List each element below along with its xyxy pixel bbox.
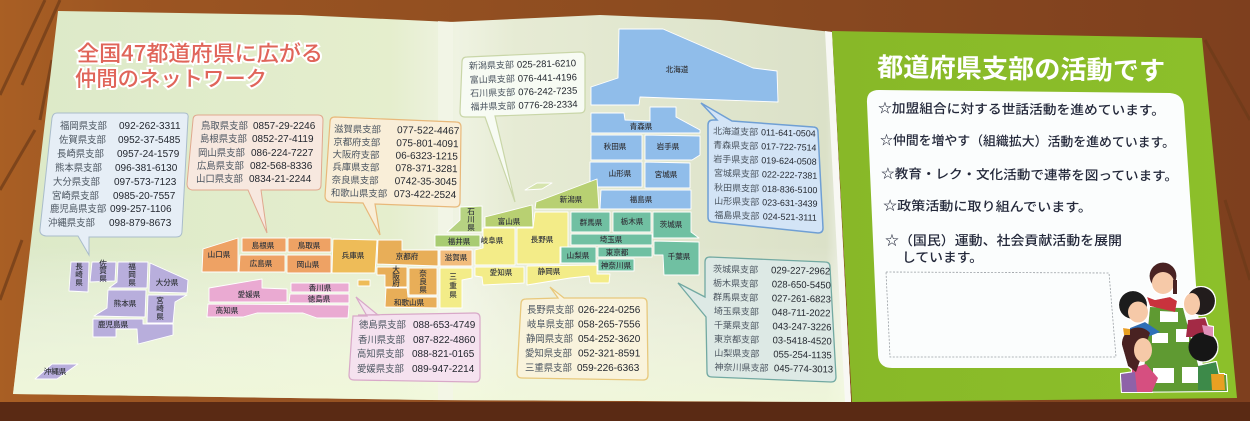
callout bubble — [349, 297, 480, 382]
phone list: 058-265-7556 — [578, 320, 641, 330]
callout bubble — [40, 113, 188, 255]
Fukuoka: 福 — [128, 261, 136, 272]
callout: Chugoku branches — [187, 115, 323, 233]
phone list: 052-321-8591 — [578, 348, 641, 360]
phone list: 広島県支部 — [197, 158, 244, 172]
phone list: 岡山県支部 — [198, 145, 245, 159]
phone list: 018-836-5100 — [762, 184, 818, 195]
Nara: 奈 — [419, 268, 427, 279]
phone list — [357, 317, 476, 375]
phone list: 新潟県支部 — [469, 58, 514, 72]
dashed blank box — [886, 272, 1116, 357]
Hyogo: 兵庫県 — [342, 250, 365, 261]
bottom sticker base — [1121, 375, 1227, 392]
phone list: 075-801-4091 — [396, 138, 459, 150]
phone list: 鹿児島県支部 — [50, 201, 106, 215]
phone list: 011-641-0504 — [761, 127, 816, 139]
Saga: 賀 — [99, 265, 107, 276]
Fukui — [435, 235, 480, 247]
phone list: 076-242-7235 — [518, 86, 577, 98]
map: Kinki — [332, 239, 472, 308]
map: Chubu and Mie — [440, 212, 610, 308]
Saga: 佐 — [99, 258, 107, 269]
girl at top — [1147, 262, 1177, 312]
Miyagi: 宮城県 — [655, 169, 678, 180]
heading: 都道府県支部の活動です — [877, 47, 1165, 88]
phone list: 沖縄県支部 — [48, 215, 95, 229]
Nagano — [517, 212, 568, 264]
phone list: 055-254-1135 — [773, 349, 832, 362]
Tokushima: 徳島県 — [308, 294, 331, 304]
map: Chugoku — [202, 238, 331, 273]
Nagasaki: 県 — [75, 277, 83, 288]
Osaka: 大 — [392, 264, 400, 275]
phone list: 三重県支部 — [525, 360, 572, 374]
activity list: しています。 — [902, 247, 983, 266]
phone list — [48, 118, 181, 229]
Okinawa: 沖縄県 — [44, 366, 67, 377]
phone list: 宮崎県支部 — [52, 188, 99, 202]
phone list: 静岡県支部 — [526, 331, 573, 345]
phone list: 熊本県支部 — [55, 160, 102, 174]
Kochi: 高知県 — [216, 305, 239, 316]
callout: Hokkaido and Tohoku branches — [701, 103, 823, 233]
activity list: ☆教育・レク・文化活動で連帯を図っています。 — [881, 163, 1178, 185]
Ishikawa: 石 — [467, 206, 475, 217]
phone list: 082-568-8336 — [250, 161, 313, 172]
Shizuoka: 静岡県 — [538, 266, 561, 277]
phone list: 06-6323-1215 — [395, 151, 458, 163]
Chiba: 千葉県 — [668, 251, 691, 262]
phone list — [331, 121, 460, 201]
phone list: 北海道支部 — [713, 124, 758, 138]
map: Kanto — [561, 212, 699, 275]
phone list: 03-5418-4520 — [772, 335, 832, 348]
Niigata: 新潟県 — [560, 194, 583, 205]
Hokkaido — [591, 29, 778, 105]
phone list: 和歌山県支部 — [331, 185, 387, 200]
Akita: 秋田県 — [604, 141, 627, 152]
phone list: 019-624-0508 — [761, 155, 817, 167]
phone list: 045-774-3013 — [774, 363, 833, 376]
phone list: 岩手県支部 — [713, 152, 759, 166]
phone list: 098-879-8673 — [109, 218, 172, 229]
phone list: 048-711-2022 — [772, 307, 831, 319]
map: Hokuriku — [435, 179, 599, 247]
phone list: 0985-20-7557 — [113, 191, 176, 202]
Oita — [149, 263, 188, 293]
Ehime: 愛媛県 — [238, 289, 261, 300]
map: Hokkaido and Tohoku — [590, 29, 778, 209]
Kanagawa: 神奈川県 — [601, 260, 632, 271]
Ishikawa: 県 — [467, 222, 475, 233]
callout bubble — [517, 287, 648, 380]
Saitama: 埼玉県 — [600, 234, 623, 245]
phone list: 096-381-6130 — [115, 163, 178, 174]
phone list: 石川県支部 — [470, 85, 515, 99]
Osaka — [377, 264, 407, 289]
phone list: 大阪府支部 — [333, 146, 380, 161]
callout bubble — [460, 52, 585, 202]
callout bubble — [325, 117, 461, 235]
Miyazaki: 宮 — [156, 295, 164, 306]
Fukushima — [600, 190, 691, 209]
phone list: 徳島県支部 — [359, 317, 406, 331]
Toyama — [485, 205, 533, 227]
panel: open booklet map spread — [13, 11, 851, 402]
woman at lower left — [1122, 328, 1158, 392]
table — [1142, 307, 1205, 391]
phone list: 0776-28-2334 — [518, 99, 578, 112]
phone list: 088-653-4749 — [413, 320, 476, 331]
phone list: 025-281-6210 — [517, 58, 576, 71]
Akita — [591, 135, 642, 160]
Miyazaki: 崎 — [156, 303, 164, 314]
Gifu: 岐阜県 — [481, 235, 504, 246]
title: 全国47都道府県に広がる仲間のネットワーク — [75, 37, 323, 93]
Nagasaki — [69, 261, 89, 292]
Saga — [90, 258, 116, 284]
Shimane: 島根県 — [252, 240, 275, 251]
Saga: 県 — [99, 273, 107, 284]
phone list: 089-947-2214 — [412, 364, 475, 375]
phone list: 097-573-7123 — [114, 177, 177, 188]
Fukui: 福井県 — [448, 236, 471, 247]
Kyoto: 京都府 — [396, 251, 419, 262]
activity list: ☆（国民）運動、社会貢献活動を展開 — [885, 230, 1122, 249]
Mie — [440, 268, 472, 308]
phone list: 埼玉県支部 — [714, 304, 759, 318]
phone list: 東京都支部 — [714, 332, 759, 346]
phone list: 福島県支部 — [714, 208, 760, 222]
phone list: 078-371-3281 — [395, 163, 458, 175]
callout: Kanto branches — [678, 257, 836, 382]
Ishikawa: 川 — [467, 214, 475, 225]
phone list: 山口県支部 — [196, 171, 243, 185]
Ehime — [209, 279, 287, 302]
Iwate: 岩手県 — [657, 141, 680, 152]
Aomori: 青森県 — [630, 121, 653, 132]
phone list: 秋田県支部 — [714, 181, 759, 195]
phone list: 山形県支部 — [714, 194, 759, 208]
white content card — [867, 90, 1203, 368]
Iwate — [645, 135, 700, 160]
Kagoshima: 鹿児島県 — [98, 319, 129, 330]
phone list: 022-222-7381 — [762, 169, 817, 181]
Nara: 良 — [419, 276, 427, 287]
Nagasaki: 崎 — [75, 269, 83, 280]
phone list: 024-521-3111 — [763, 211, 817, 223]
phone list: 奈良県支部 — [332, 172, 379, 187]
Sado island — [525, 183, 552, 190]
Fukuoka: 県 — [128, 277, 136, 288]
phone list: 0742-35-3045 — [395, 176, 457, 188]
Aomori — [591, 107, 700, 133]
phone list: 023-631-3439 — [762, 197, 818, 209]
phone list: 029-227-2962 — [771, 265, 830, 277]
Kumamoto: 熊本県 — [114, 298, 137, 309]
phone list: 茨城県支部 — [713, 262, 758, 276]
callout: Hokuriku branches — [460, 52, 585, 202]
panel: green activities page — [832, 31, 1237, 402]
Gifu — [475, 228, 515, 265]
Yamagata — [590, 162, 642, 187]
phone list — [525, 302, 641, 374]
phone list: 059-226-6363 — [577, 363, 640, 374]
phone list: 宮城県支部 — [714, 166, 759, 180]
Miyazaki: 県 — [156, 311, 164, 322]
Ishikawa — [447, 206, 482, 233]
phone list: 佐賀県支部 — [59, 132, 106, 146]
phone list: 054-252-3620 — [578, 334, 641, 345]
phone list: 香川県支部 — [358, 332, 405, 346]
Shiga: 滋賀県 — [445, 252, 468, 263]
Miyagi — [645, 162, 690, 188]
Gunma: 群馬県 — [580, 217, 603, 228]
phone list: 富山県支部 — [470, 72, 515, 86]
phone list: 0952-37-5485 — [118, 135, 181, 146]
phone list: 077-522-4467 — [397, 125, 460, 137]
phone list: 群馬県支部 — [713, 290, 758, 304]
activity list: ☆政策活動に取り組んでいます。 — [883, 195, 1092, 216]
phone list: 092-262-3311 — [119, 121, 181, 132]
phone list: 栃木県支部 — [713, 276, 758, 290]
phone list: 愛知県支部 — [525, 346, 572, 360]
Kagoshima — [93, 319, 173, 344]
Aichi — [475, 267, 524, 285]
callout: Chubu branches — [517, 287, 648, 380]
phone list: 岐阜県支部 — [527, 316, 574, 330]
Nagasaki: 長 — [75, 261, 83, 272]
callout bubble — [678, 257, 836, 382]
phone list: 0834-21-2244 — [249, 174, 312, 185]
phone list: 0852-27-4119 — [252, 134, 314, 145]
Okinawa — [35, 364, 78, 379]
phone list: 愛媛県支部 — [357, 361, 404, 375]
phone list: 027-261-6823 — [772, 293, 831, 305]
callout: Kinki branches — [325, 117, 461, 235]
phone list: 028-650-5450 — [772, 279, 831, 291]
phone list: 青森県支部 — [713, 138, 758, 152]
phone list: 兵庫県支部 — [332, 159, 379, 174]
phone list: 086-224-7227 — [251, 148, 314, 159]
phone list: 島根県支部 — [200, 131, 247, 145]
phone list: 山梨県支部 — [714, 346, 759, 360]
title: 全国47都道府県に広がる仲間のネットワーク: 全国47都道府県に広がる — [77, 37, 323, 68]
phone list — [711, 262, 835, 376]
illustration: five people meeting around a table — [1119, 262, 1227, 392]
Osaka: 阪 — [392, 271, 400, 282]
callout: Kyushu and Okinawa branches — [40, 113, 188, 255]
Mie: 県 — [449, 289, 457, 300]
phone list — [196, 118, 316, 185]
Mie: 重 — [449, 280, 457, 291]
Oita: 大分県 — [156, 277, 179, 288]
phone list: 大分県支部 — [53, 174, 100, 188]
Hiroshima: 広島県 — [250, 258, 273, 269]
Fukuoka: 岡 — [128, 269, 136, 280]
Mie: 三 — [449, 271, 457, 282]
map: Kyushu and Okinawa — [35, 258, 188, 379]
phone list: 088-821-0165 — [412, 349, 475, 360]
Toyama: 富山県 — [498, 216, 521, 227]
phone list: 0857-29-2246 — [253, 121, 316, 132]
Kagawa: 香川県 — [309, 282, 332, 294]
Yamaguchi: 山口県 — [208, 249, 231, 260]
Tokyo: 東京都 — [606, 247, 629, 258]
activity list: ☆加盟組合に対する世話活動を進めています。 — [878, 98, 1165, 119]
activity list: ☆仲間を増やす（組織拡大）活動を進めています。 — [880, 130, 1175, 151]
phone list — [711, 124, 820, 224]
Awaji island — [358, 280, 370, 286]
title: 全国47都道府県に広がる仲間のネットワーク: 仲間のネットワーク — [75, 63, 267, 93]
Wakayama: 和歌山県 — [394, 297, 425, 308]
cushions and bags — [1121, 325, 1225, 392]
phone list: 099-257-1106 — [110, 204, 172, 215]
Fukuoka — [109, 261, 148, 288]
person at lower right — [1188, 332, 1222, 390]
Nagano: 長野県 — [531, 234, 554, 245]
phone list: 長崎県支部 — [57, 146, 104, 160]
phone list: 043-247-3226 — [772, 321, 832, 333]
phone list: 076-441-4196 — [518, 72, 577, 85]
Tottori: 鳥取県 — [298, 240, 321, 251]
phone list: 087-822-4860 — [413, 335, 476, 346]
phone list: 福井県支部 — [470, 99, 516, 113]
callout bubble — [701, 103, 823, 233]
Kagawa — [291, 282, 349, 294]
phone list: 千葉県支部 — [714, 318, 759, 332]
activity list — [878, 98, 1178, 266]
Niigata — [535, 179, 599, 209]
phone list: 福岡県支部 — [60, 118, 107, 132]
callout bubble — [187, 115, 323, 233]
phone list: 高知県支部 — [357, 346, 404, 360]
table papers — [1152, 311, 1200, 383]
phone list: 長野県支部 — [527, 302, 574, 316]
Nara: 県 — [419, 284, 427, 295]
phone list: 神奈川県支部 — [714, 360, 769, 374]
callout: Shikoku branches — [349, 297, 480, 382]
phone list: 鳥取県支部 — [201, 118, 248, 132]
Yamanashi: 山梨県 — [567, 250, 590, 261]
boy at left — [1119, 291, 1160, 336]
phone list: 073-422-2524 — [394, 189, 457, 201]
phone list: 滋賀県支部 — [334, 121, 381, 136]
map: Shikoku — [207, 279, 349, 318]
Miyazaki — [147, 295, 187, 323]
Tochigi: 栃木県 — [621, 216, 644, 227]
phone list — [469, 56, 578, 113]
woman at right — [1184, 287, 1215, 337]
Fukushima: 福島県 — [630, 194, 653, 205]
Aichi: 愛知県 — [490, 267, 513, 278]
Shizuoka — [527, 265, 610, 285]
phone list: 0957-24-1579 — [117, 149, 180, 160]
Yamagata: 山形県 — [609, 168, 632, 179]
phone list: 京都府支部 — [333, 134, 380, 149]
Hokkaido: 北海道 — [666, 64, 689, 75]
Tokushima — [289, 294, 349, 304]
Ibaraki: 茨城県 — [660, 219, 683, 230]
Okayama: 岡山県 — [297, 259, 320, 270]
Nara — [409, 268, 437, 295]
Osaka: 府 — [392, 278, 400, 289]
Kumamoto — [94, 290, 146, 317]
Kochi — [207, 304, 349, 318]
phone list: 017-722-7514 — [761, 141, 817, 153]
phone list: 026-224-0256 — [578, 305, 641, 316]
